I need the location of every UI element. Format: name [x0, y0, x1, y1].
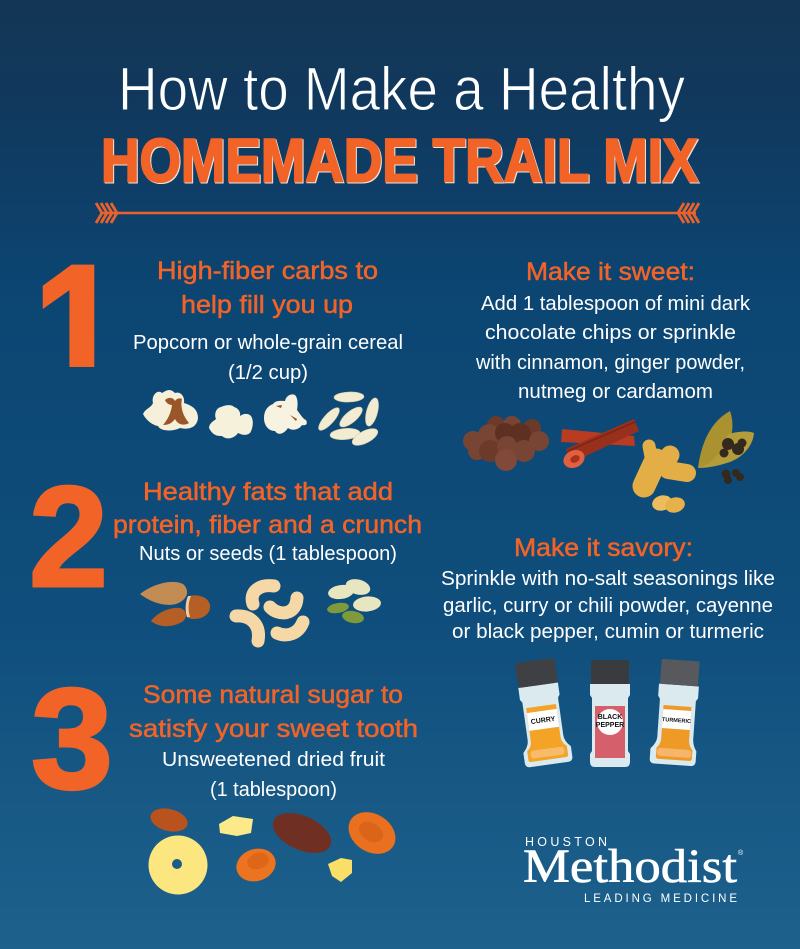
logo: Houston Methodist: Methodist [523, 840, 738, 893]
apricot [341, 804, 403, 862]
section 1 text: High-fiber carbs to [157, 257, 378, 285]
sweet text: with cinnamon, ginger powder, [475, 352, 745, 374]
sweet text: chocolate chips or sprinkle [485, 322, 736, 344]
section 1 text: help fill you up [181, 291, 353, 319]
pineapple ring [148, 836, 208, 894]
popcorn 1 [143, 390, 198, 430]
sweet text: Add 1 tablespoon of mini dark [481, 293, 751, 315]
date [267, 805, 337, 861]
cereal grains [316, 391, 381, 449]
section 2 text: protein, fiber and a crunch [113, 511, 422, 539]
popcorn 3 [264, 394, 307, 434]
section 3 text: satisfy your sweet tooth [129, 715, 418, 743]
pineapple chunk [328, 858, 352, 882]
section 3 text: (1 tablespoon) [210, 779, 337, 801]
icon: popcorn and cereal grains [143, 390, 381, 449]
section 1 text: (1/2 cup) [228, 362, 308, 384]
icon: black pepper jar: PEPPER [596, 722, 624, 729]
section 3 text: Some natural sugar to [143, 681, 403, 709]
icon: dried fruit [148, 804, 403, 894]
icon: chocolate chips [463, 416, 549, 471]
logo: Houston Methodist: HOUSTON [525, 835, 607, 849]
icon: cashews [236, 586, 303, 641]
icon: cinnamon sticks [560, 419, 639, 471]
section 1 text [133, 257, 403, 384]
title line 2: HOMEMADE TRAIL MIX [102, 128, 699, 196]
title line 1: How to Make a Healthy [118, 55, 685, 123]
logo: Houston Methodist: LEADING MEDICINE [584, 893, 737, 905]
icon: seeds [326, 577, 382, 625]
icon: almonds [140, 582, 210, 626]
number 3: 3 [31, 660, 113, 819]
icon: cardamom [698, 411, 754, 484]
number 1: 1 [33, 226, 123, 431]
icon: turmeric jar: TURMERIC [662, 717, 691, 725]
section 2 text: Nuts or seeds (1 tablespoon) [139, 543, 397, 565]
apricot [232, 844, 280, 886]
savory text: Sprinkle with no-salt seasonings like [441, 568, 775, 590]
icon: ginger [644, 446, 687, 515]
pineapple chunk [219, 816, 253, 836]
section 3 text: Unsweetened dried fruit [162, 749, 385, 771]
title [101, 55, 699, 196]
section 2 text [113, 478, 422, 565]
icon: curry jar: CURRY [530, 716, 556, 726]
sweet text: nutmeg or cardamom [518, 381, 713, 403]
icon: turmeric jar [649, 658, 703, 766]
icon: black pepper jar: BLACK [598, 714, 622, 721]
raisin [148, 805, 190, 835]
savory text: or black pepper, cumin or turmeric [452, 621, 764, 643]
logo: Houston Methodist: ® [738, 849, 744, 857]
savory text: Make it savory: [514, 534, 693, 562]
section 3 text [129, 681, 418, 801]
title line 2: HOMEMADE TRAIL MIX [101, 126, 698, 194]
arrow divider [96, 203, 699, 223]
sweet text [475, 258, 751, 403]
section 1 text: Popcorn or whole-grain cereal [133, 332, 403, 354]
section 2 text: Healthy fats that add [143, 478, 393, 506]
icon: curry jar [511, 657, 573, 768]
savory text: garlic, curry or chili powder, cayenne [443, 595, 773, 617]
logo: Houston Methodist [523, 835, 744, 905]
icon: black pepper jar [590, 660, 630, 767]
popcorn 2 [209, 405, 253, 438]
number 2: 2 [29, 458, 108, 617]
sweet text: Make it sweet: [526, 258, 695, 286]
savory text [441, 534, 775, 643]
